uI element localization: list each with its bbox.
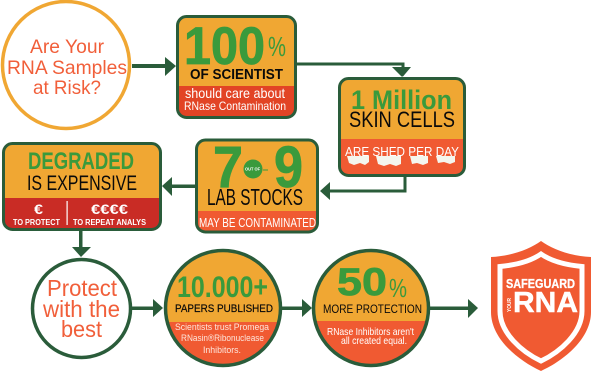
panel: degraded is expensive: TO PROTECT — [13, 218, 60, 227]
panel: 7 out of 9 lab stocks: LAB STOCKS — [207, 184, 303, 210]
circle: 10,000 papers published: Inhibitors. — [203, 345, 241, 355]
arrow: 7 of 9 to degraded — [162, 177, 196, 196]
panel: 100 percent of scientists: 100 — [184, 17, 265, 76]
panel: 7 out of 9 lab stocks: 9 — [274, 135, 303, 200]
panel: 7 out of 9 lab stocks: 7 — [213, 135, 243, 200]
circle: Are your RNA samples at risk: at Risk? — [33, 77, 101, 99]
circle: 50 percent more protection: all created equal. — [341, 335, 407, 347]
icon: safeguard your RNA shield: YOUR — [507, 298, 513, 312]
arrow: degraded to protect — [72, 231, 91, 257]
circle: protect with the best: Protect — [47, 275, 118, 301]
panel: 1 million skin cells: 1 Million — [351, 85, 452, 115]
panel: 100 percent of scientists: should care about — [185, 85, 285, 101]
panel: 100 percent of scientists: % — [268, 31, 286, 62]
circle: 50 percent more protection — [313, 250, 429, 367]
circle: protect with the best: with the — [42, 296, 120, 322]
panel: degraded is expensive — [3, 144, 161, 230]
panel: 100 percent of scientists: OF SCIENTIST — [190, 66, 283, 83]
icon: safeguard your RNA shield: RNA — [513, 287, 578, 319]
circle: protect with the best: best — [61, 316, 103, 342]
arrow: papers to protection — [282, 299, 312, 317]
arrow: 100 percent to 1 million — [297, 62, 411, 76]
circle: 50 percent more protection: 50 — [337, 261, 387, 304]
circle: protect with the best — [32, 260, 130, 358]
icon: safeguard your RNA shield — [491, 241, 591, 371]
arrow: protection to shield — [429, 299, 478, 318]
panel: 100 percent of scientists: RNase Contamination — [184, 99, 286, 113]
arrow: protect to papers — [132, 299, 163, 317]
circle: 50 percent more protection: RNase Inhibitors aren't — [327, 326, 414, 338]
panel: degraded is expensive: €€€€ — [91, 201, 128, 217]
panel: degraded is expensive: IS EXPENSIVE — [27, 172, 137, 195]
panel: 100 percent of scientists — [177, 16, 296, 119]
circle: 10,000 papers published — [164, 250, 282, 368]
circle: 50 percent more protection: % — [389, 273, 407, 303]
arrow: 1 million to 7 of 9 — [320, 176, 406, 200]
panel: degraded is expensive: € — [34, 201, 43, 217]
circle: 50 percent more protection: MORE PROTECTION — [323, 302, 422, 316]
panel: degraded is expensive: TO REPEAT ANALYS — [73, 218, 147, 227]
panel: 1 million skin cells: ARE SHED PER DAY — [345, 144, 459, 159]
icon: safeguard your RNA shield: SAFEGUARD — [506, 277, 575, 291]
circle: 10,000 papers published: Scientists trust Promega — [175, 322, 269, 332]
panel: degraded is expensive: DEGRADED — [28, 148, 134, 175]
panel: 7 out of 9 lab stocks — [196, 135, 318, 233]
panel: 1 million skin cells — [339, 78, 465, 176]
circle: 10,000 papers published: PAPERS PUBLISHED — [175, 303, 273, 315]
panel: 7 out of 9 lab stocks: MAY BE CONTAMINATED — [199, 215, 316, 230]
circle: Are your RNA samples at risk — [2, 2, 130, 128]
circle: 10,000 papers published: 10.000+ — [177, 271, 268, 304]
circle: Are your RNA samples at risk: Are Your — [30, 36, 104, 58]
grass under the words — [347, 156, 455, 166]
panel: 1 million skin cells: SKIN CELLS — [349, 107, 455, 132]
circle: 10,000 papers published: RNasin®Ribonuclease — [181, 333, 264, 343]
arrow: risk circle to 100 percent — [132, 57, 176, 76]
panel: 7 out of 9 lab stocks: OUT OF — [245, 166, 260, 172]
circle: Are your RNA samples at risk: RNA Samples — [7, 57, 127, 79]
